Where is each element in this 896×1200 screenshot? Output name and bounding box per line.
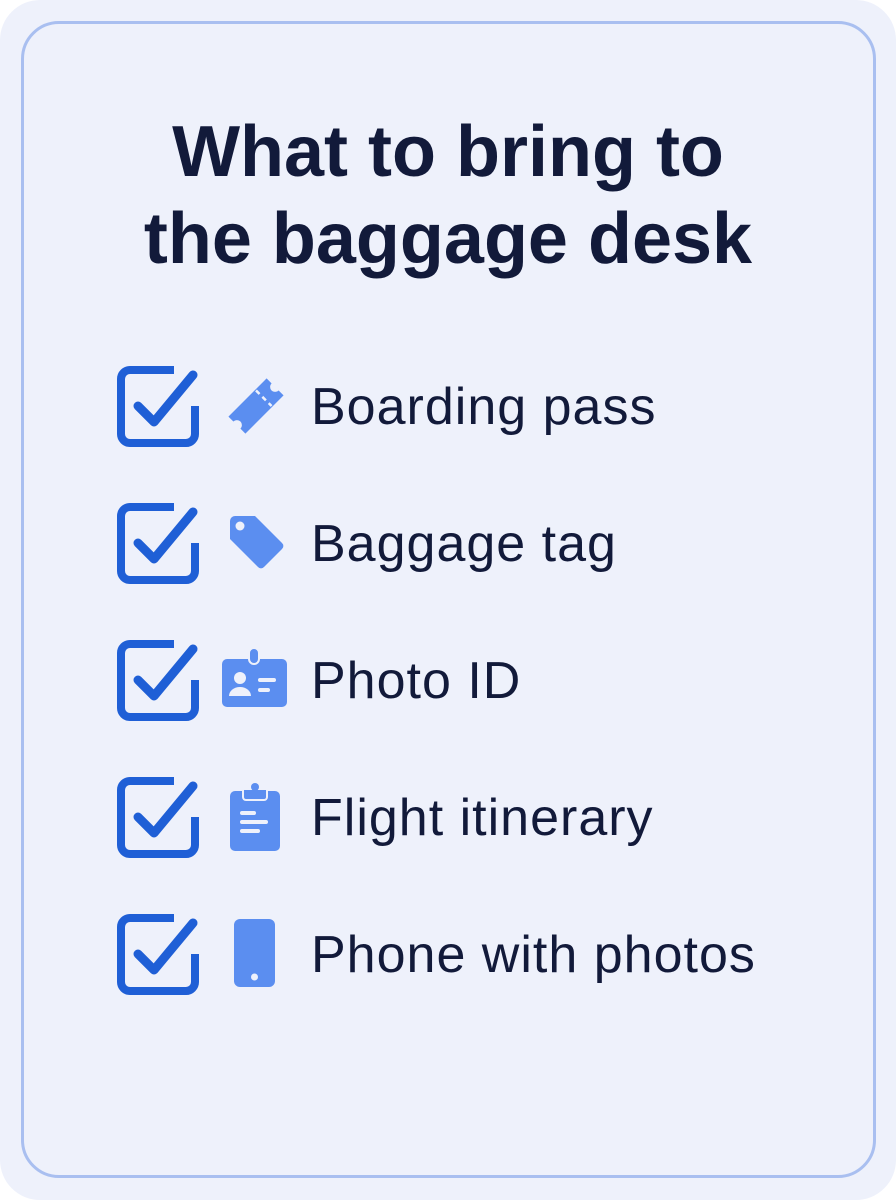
title: the baggage desk bbox=[144, 199, 752, 279]
item: boarding pass: Boarding pass bbox=[311, 378, 656, 436]
item: baggage tag bbox=[117, 503, 617, 584]
item: baggage tag: Baggage tag bbox=[311, 515, 617, 573]
icon: ticket bbox=[228, 378, 284, 434]
icon: phone bbox=[234, 919, 275, 987]
item: photo id: Photo ID bbox=[311, 652, 521, 710]
title: What to bring to bbox=[172, 112, 724, 192]
item: boarding pass bbox=[117, 366, 656, 447]
item: photo id bbox=[117, 640, 521, 721]
item: flight itinerary: Flight itinerary bbox=[311, 789, 654, 847]
icon: tag bbox=[230, 516, 284, 568]
item: flight itinerary bbox=[117, 777, 654, 858]
title bbox=[144, 112, 752, 279]
item: phone with photos: Phone with photos bbox=[311, 926, 756, 984]
icon: clipboard bbox=[230, 783, 280, 851]
icon: id badge bbox=[222, 649, 287, 707]
item: phone with photos bbox=[117, 914, 756, 995]
